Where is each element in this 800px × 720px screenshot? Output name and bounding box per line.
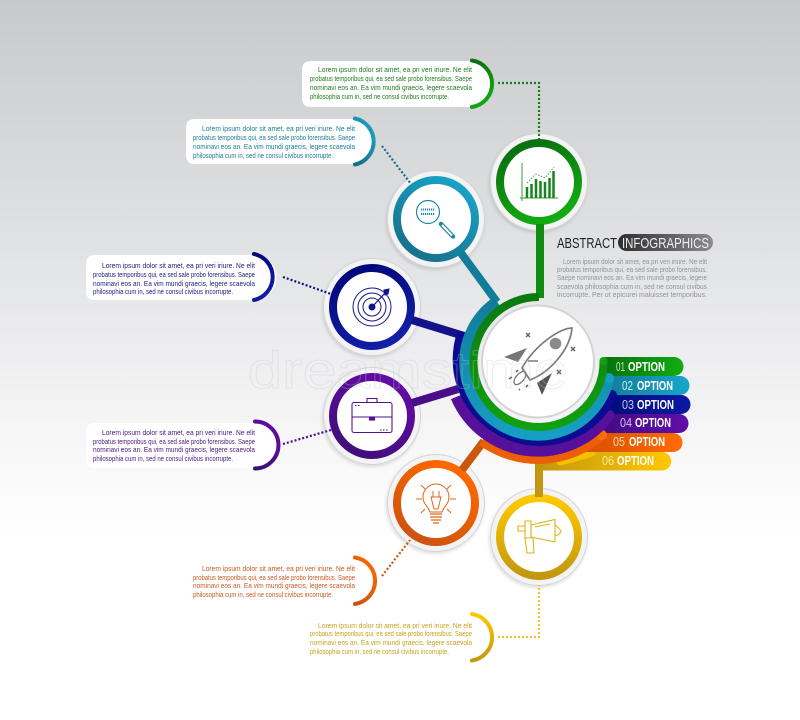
tab 01: 01 — [616, 360, 625, 374]
tab 05: 05 — [613, 435, 625, 449]
central circle with rocket icon — [482, 306, 594, 418]
callout: green: philosophia cum in, sed ne consul civibus incorrupte. — [310, 92, 449, 101]
node: target (blue) — [324, 258, 420, 356]
callout: orange — [193, 558, 375, 604]
tab 03 — [596, 395, 690, 414]
callout: purple: Lorem ipsum dolor sit amet, ea pri veri iriure. Ne elit — [102, 428, 256, 437]
icon: megaphone — [518, 520, 561, 553]
callout: blue: Lorem ipsum dolor sit amet, ea pri veri iriure. Ne elit — [102, 261, 256, 270]
callout: yellow: Lorem ipsum dolor sit amet, ea pri veri iriure. Ne elit — [318, 621, 473, 630]
title — [557, 234, 713, 252]
tab 03: 03 — [622, 398, 634, 412]
tab 02: 02 — [622, 379, 633, 393]
title: ABSTRACT — [557, 235, 617, 252]
callout: yellow: nominavi eos an. Ea vim mundi graecis, legere scaevola — [310, 638, 473, 647]
callout: yellow — [310, 614, 492, 660]
callout: purple — [86, 422, 278, 468]
intro text block: scaevola philosophia cum in, sed ne consul civibus — [557, 282, 707, 291]
node: megaphone (yellow) — [490, 488, 588, 586]
callout: teal: philosophia cum in, sed ne consul civibus incorrupte. — [193, 151, 333, 160]
tab 06 — [535, 452, 671, 497]
intro text block — [557, 257, 708, 299]
dotted connector: blue — [283, 277, 331, 294]
callout: green: nominavi eos an. Ea vim mundi graecis, legere scaevola — [310, 83, 473, 92]
tab 06: OPTION — [617, 454, 654, 468]
tab 04: 04 — [620, 416, 632, 430]
tab 02 — [602, 376, 690, 395]
icon: rocket — [504, 328, 575, 395]
tab 05 — [570, 433, 682, 452]
callout: blue: nominavi eos an. Ea vim mundi graecis, legere scaevola — [93, 279, 256, 288]
icon: bar chart — [520, 163, 558, 201]
callout: blue — [86, 254, 276, 300]
callout: teal: Lorem ipsum dolor sit amet, ea pri veri iriure. Ne elit — [202, 124, 356, 133]
tab 02: OPTION — [637, 379, 673, 393]
dotted connector: green — [498, 83, 539, 139]
node: chart (green) — [490, 134, 588, 230]
watermark: dreamstime — [248, 342, 568, 400]
callout: orange: nominavi eos an. Ea vim mundi graecis, legere scaevola — [193, 581, 356, 590]
tab 01: OPTION — [628, 360, 665, 374]
callout: teal — [186, 118, 374, 164]
tab 04 — [585, 414, 688, 433]
callout: yellow: philosophia cum in, sed ne consul civibus incorrupte. — [310, 647, 449, 656]
dotted connector: teal — [382, 146, 411, 184]
dotted connector: orange — [382, 540, 410, 576]
intro text block: probatus temporibus qui, ea sed sale probo forensibus. — [557, 265, 707, 274]
callout: blue: probatus temporibus qui, ea sed sale probo forensibus. Saepe — [93, 270, 255, 279]
intro text block: Saepe nominavi eos an. Ea vim mundi graecis, legere — [557, 273, 707, 282]
callout: purple: nominavi eos an. Ea vim mundi graecis, legere scaevola — [93, 445, 256, 454]
callout: teal: probatus temporibus qui, ea sed sale probo forensibus. Saepe — [193, 133, 355, 142]
tab 05: OPTION — [629, 435, 665, 449]
callout: purple: philosophia cum in, sed ne consul civibus incorrupte. — [93, 454, 233, 463]
tab 04: OPTION — [635, 416, 671, 430]
callout: teal: nominavi eos an. Ea vim mundi graecis, legere scaevola — [193, 142, 356, 151]
node: magnifier (teal) — [388, 170, 484, 268]
tab 03: OPTION — [637, 398, 674, 412]
callout: orange: probatus temporibus qui, ea sed sale probo forensibus. Saepe — [193, 573, 355, 582]
callout: purple: probatus temporibus qui, ea sed sale probo forensibus. Saepe — [93, 437, 255, 446]
dotted connector: purple — [283, 430, 331, 444]
icon: light bulb — [416, 484, 456, 523]
intro text block: incorrupte. Per ut epicurei maluisset temporibus. — [557, 290, 707, 299]
callout: green: Lorem ipsum dolor sit amet, ea pri veri iriure. Ne elit — [318, 65, 473, 74]
connector stems — [412, 224, 540, 470]
title: INFOGRAPHICS — [622, 235, 709, 252]
node: light bulb (orange) — [388, 454, 484, 552]
central concentric arcs — [456, 297, 617, 459]
callout: orange: philosophia cum in, sed ne consul civibus incorrupte. — [193, 590, 333, 599]
node: briefcase (purple) — [324, 368, 420, 464]
callout: orange: Lorem ipsum dolor sit amet, ea pri veri iriure. Ne elit — [202, 564, 356, 573]
icon: target — [353, 288, 391, 326]
tab 06: 06 — [602, 454, 614, 468]
tab 01 — [602, 357, 684, 376]
dotted connector: yellow — [498, 585, 539, 637]
callout: yellow: probatus temporibus qui, ea sed sale probo forensibus. Saepe — [310, 629, 472, 638]
icon: magnifier — [416, 200, 453, 236]
intro text block: Lorem ipsum dolor sit amet, ea pri veri iriure. Ne elit — [563, 257, 708, 266]
callout: green — [302, 60, 492, 107]
callout: green: probatus temporibus qui, ea sed sale probo forensibus. Saepe — [310, 74, 472, 83]
callout: blue: philosophia cum in, sed ne consul civibus incorrupte. — [93, 287, 233, 296]
option tabs — [535, 357, 690, 497]
icon: briefcase — [352, 398, 392, 432]
